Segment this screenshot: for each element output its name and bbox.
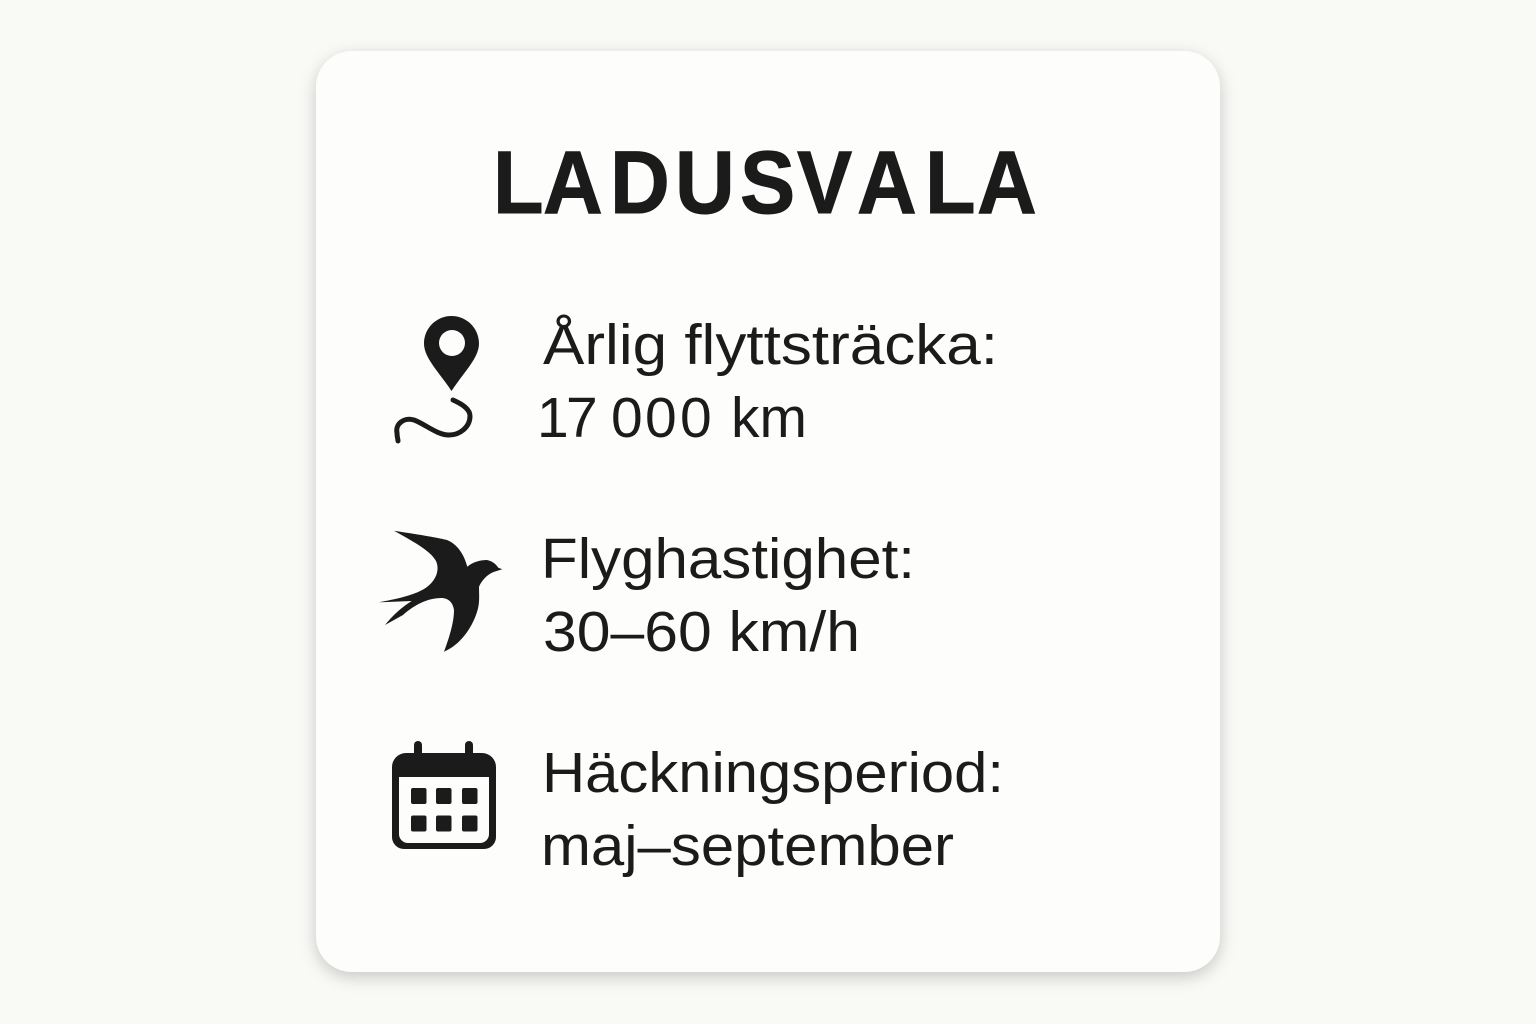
text: annual migration distance: km [731, 386, 807, 450]
text: annual migration distance: 17 [537, 386, 598, 450]
title: LADUSVALA [493, 133, 1037, 233]
text: breeding season [541, 741, 1004, 878]
text: breeding season: maj–september [541, 814, 954, 878]
text: annual migration distance: Årlig flyttsträcka: [543, 313, 998, 377]
text: breeding season: Häckningsperiod: [542, 741, 1004, 805]
icon: calendar [392, 741, 496, 849]
text: annual migration distance [537, 313, 998, 450]
text: annual migration distance: 000 [611, 386, 712, 450]
icon: swallow silhouette [378, 531, 502, 652]
text: flight speed: 30–60 km/h [543, 600, 860, 664]
icon: map pin with route [397, 316, 479, 441]
row: flight speed [378, 527, 915, 664]
row: breeding season [392, 741, 1004, 878]
text: flight speed: Flyghastighet: [541, 527, 915, 591]
row: annual migration distance [397, 313, 998, 450]
panel: card [316, 51, 1220, 972]
text: flight speed [541, 527, 915, 664]
